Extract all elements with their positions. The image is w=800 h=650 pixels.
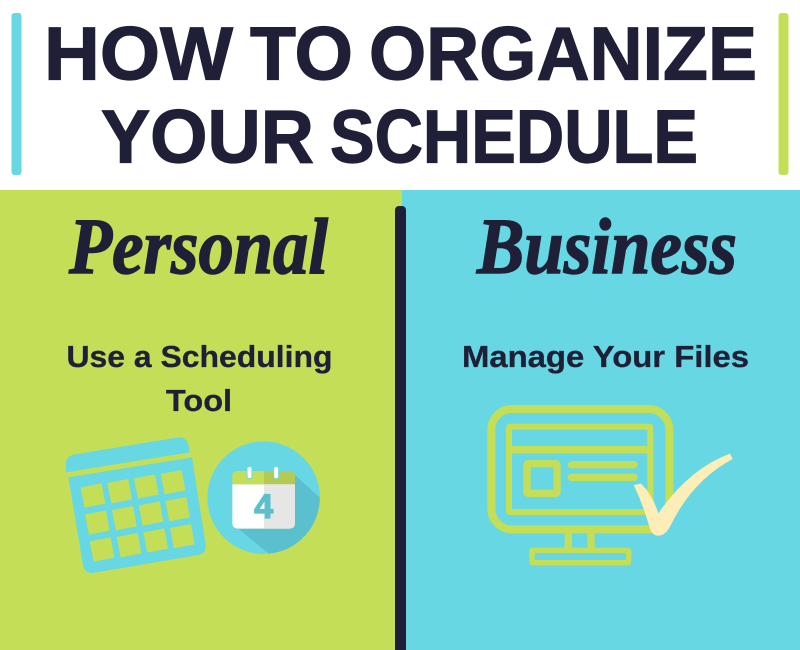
- title: SCHEDULE: [330, 94, 698, 178]
- right title accent bar: [778, 13, 788, 175]
- title: [44, 12, 757, 178]
- icon: calendar day badge: 4: [254, 488, 273, 526]
- subheading: use a scheduling tool: Use a Scheduling: [66, 339, 332, 374]
- center divider: [395, 206, 406, 650]
- subheading: manage your files: Manage Your Files: [462, 339, 749, 374]
- icon: check mark: [634, 454, 733, 536]
- title: HOW: [44, 12, 233, 96]
- title: ORGANIZE: [369, 12, 757, 96]
- icon: calendar day badge: [207, 441, 320, 554]
- subheading: use a scheduling tool: [66, 339, 332, 418]
- title: TO: [250, 12, 353, 96]
- heading: personal: Personal: [68, 204, 328, 291]
- icon: calendar grid: [66, 437, 206, 573]
- heading: business: Business: [476, 204, 737, 291]
- subheading: use a scheduling tool: Tool: [166, 383, 232, 418]
- icon: monitor: [491, 409, 669, 563]
- left title accent bar: [12, 13, 22, 175]
- panel: personal: [0, 190, 402, 650]
- panel: business: [402, 190, 800, 650]
- title: YOUR: [101, 94, 314, 178]
